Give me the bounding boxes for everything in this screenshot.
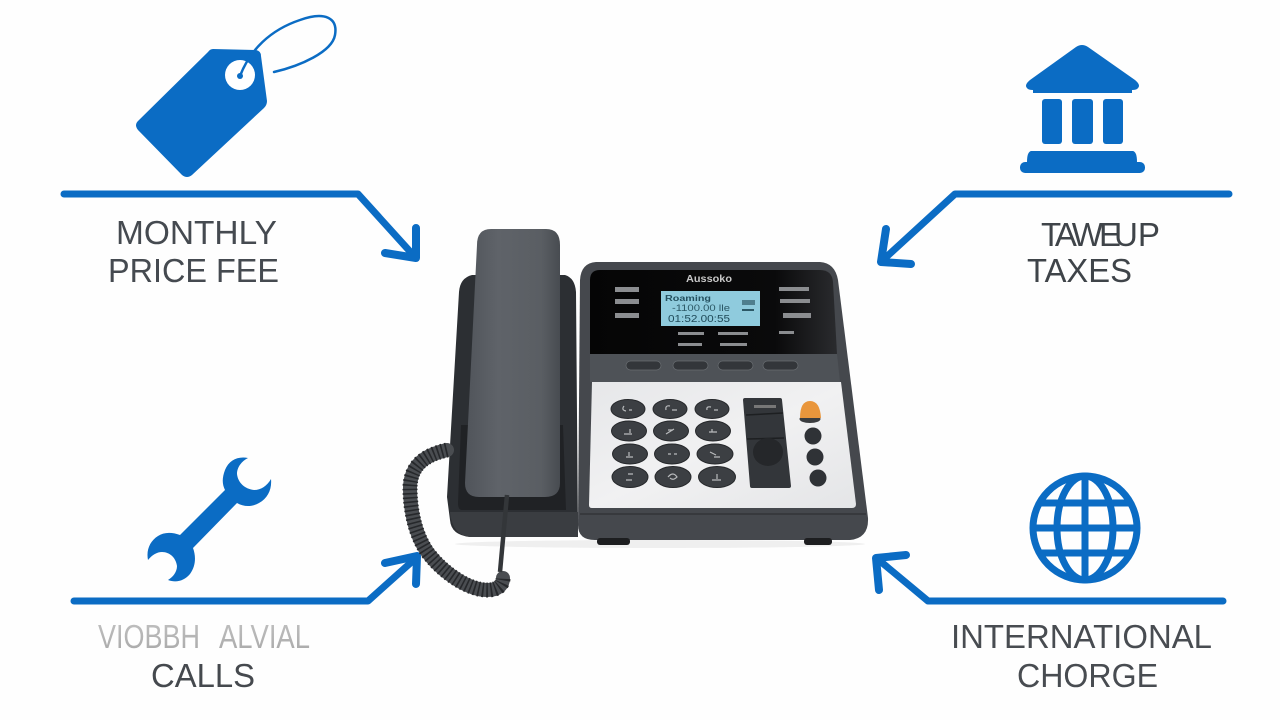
arrow: calls to phone [74, 556, 417, 601]
label: international charge: INTERNATIONAL [951, 618, 1212, 655]
lcd screen: 01:52.00:55 [668, 314, 731, 325]
icon: bank building [1020, 45, 1145, 173]
arrow: international charge to phone [876, 555, 1223, 601]
label: taxes [1027, 216, 1160, 289]
dial key marks [623, 406, 721, 480]
orange button [800, 401, 821, 423]
arrow: monthly price fee to phone [64, 194, 416, 258]
phone shadow [455, 540, 865, 548]
soft key band [590, 354, 840, 382]
label: monthly price fee [108, 214, 279, 289]
icon: globe [1033, 476, 1137, 580]
label: calls: ALVIAL [219, 618, 310, 655]
navigation pad [743, 398, 791, 488]
label: taxes: UP [1114, 216, 1160, 253]
label: calls: CALLS [151, 657, 255, 694]
label: taxes: TAWE [1041, 216, 1121, 253]
arrow: taxes to phone [881, 194, 1229, 264]
round function keys [804, 428, 826, 486]
label: monthly price fee: PRICE FEE [108, 252, 279, 289]
icon: price tag [136, 16, 335, 177]
straight cord [500, 495, 507, 572]
cradle recess [458, 425, 566, 510]
label: international charge: CHORGE [1017, 657, 1158, 694]
lcd screen [661, 291, 760, 326]
black display panel [590, 270, 837, 354]
side key labels [615, 287, 811, 346]
label: international charge [951, 618, 1212, 694]
handset [465, 229, 560, 497]
lcd screen: -1100.00 lle [672, 303, 730, 313]
dial keys [611, 400, 736, 488]
label: taxes: TAXES [1027, 252, 1132, 289]
label: calls [98, 618, 310, 694]
logo: Aussoko [686, 274, 732, 285]
cradle [447, 275, 578, 537]
lcd screen: Roaming [665, 294, 711, 303]
coiled cord [410, 450, 503, 590]
silver keypad panel [589, 382, 856, 508]
label: monthly price fee: MONTHLY [116, 214, 277, 251]
base lower shadow line [580, 513, 866, 515]
soft keys [626, 361, 798, 370]
base feet [597, 538, 832, 545]
base [578, 262, 868, 540]
desk phone [410, 229, 868, 590]
icon: wrench [147, 458, 271, 581]
label: calls: VIOBBH [98, 618, 200, 655]
